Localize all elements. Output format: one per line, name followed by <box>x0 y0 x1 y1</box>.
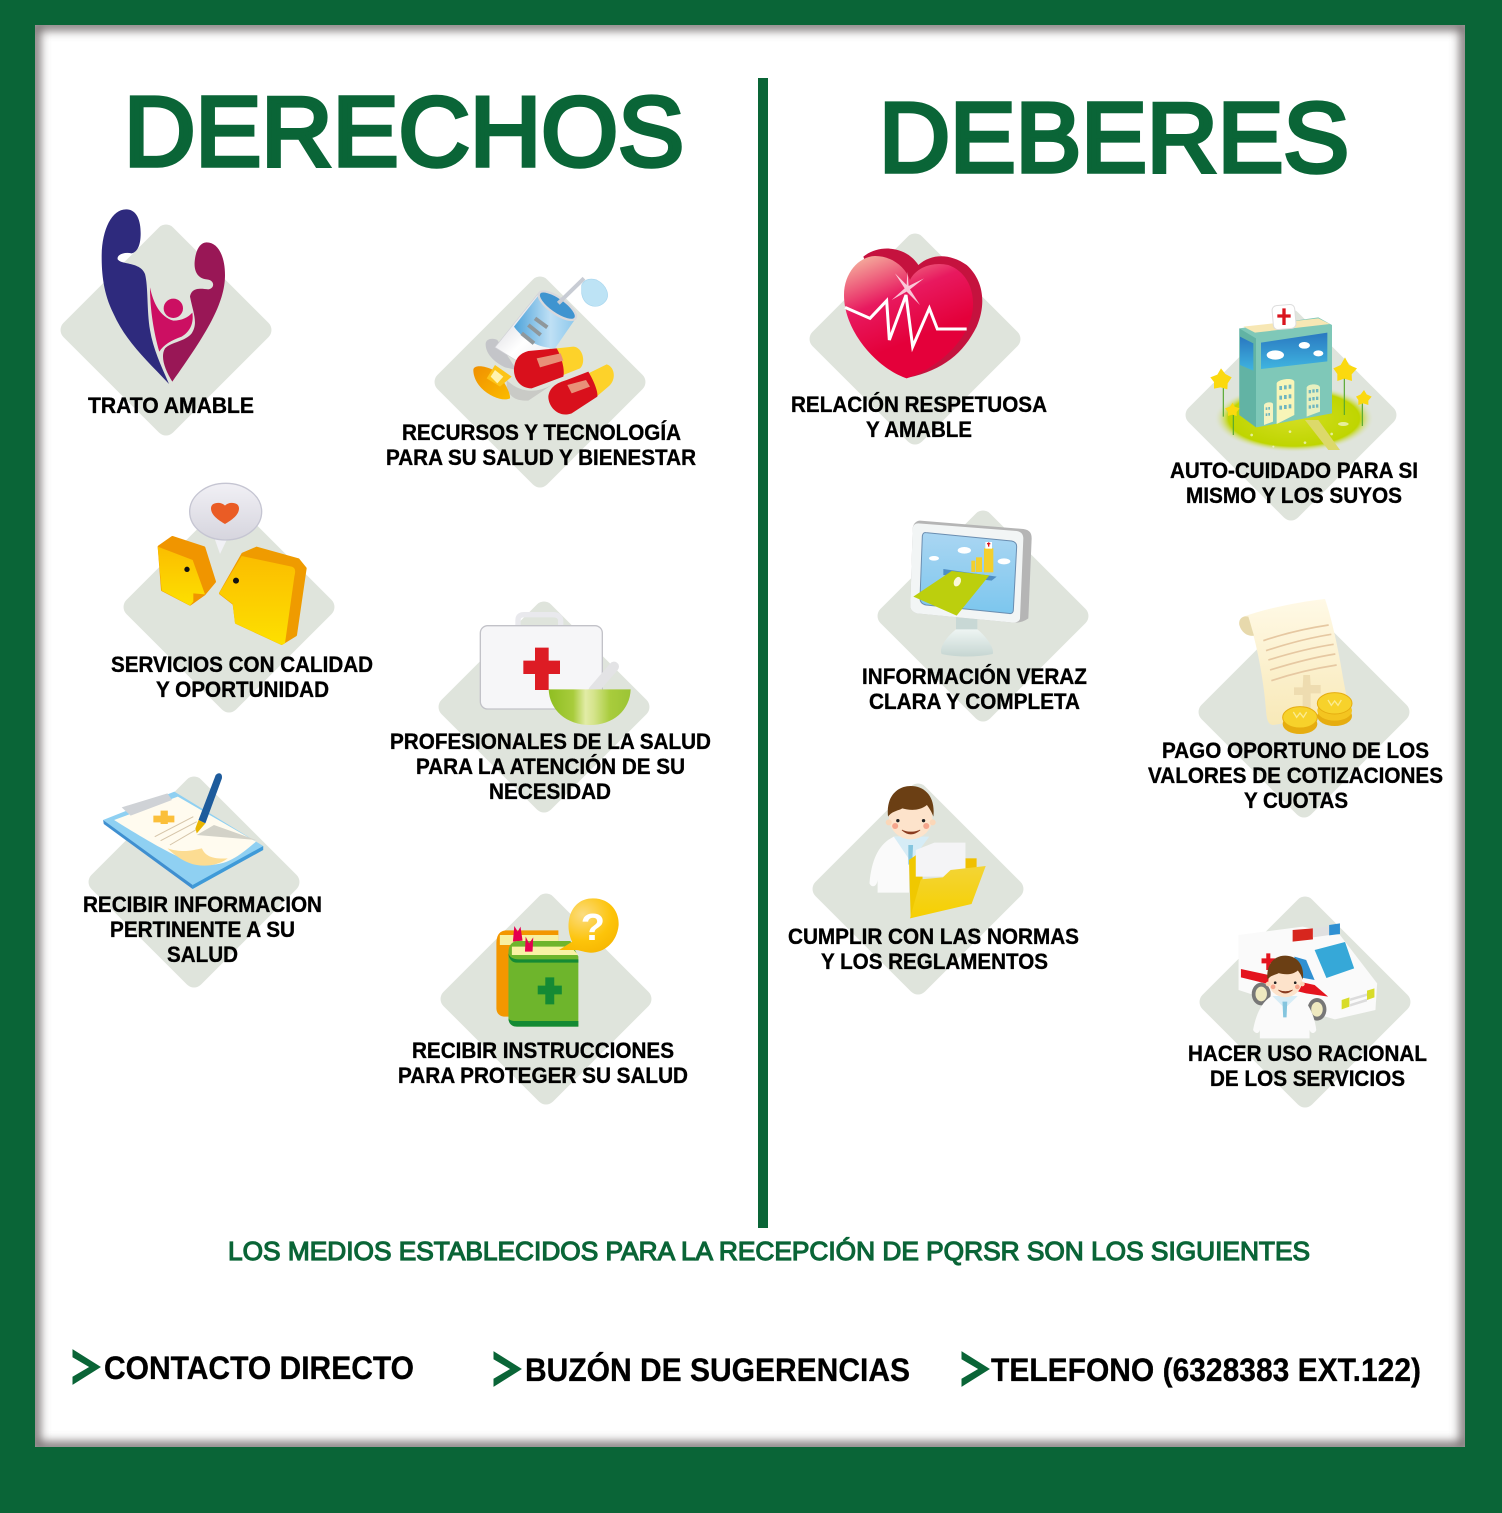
label <box>1148 738 1443 813</box>
label <box>398 1038 688 1088</box>
icon: family heart <box>102 209 225 384</box>
contact: buzon: BUZÓN DE SUGERENCIAS <box>525 1352 910 1388</box>
label: CLARA Y COMPLETA <box>869 689 1080 714</box>
label: Y OPORTUNIDAD <box>156 677 329 702</box>
label <box>791 392 1047 442</box>
icon: clipboard and pen <box>103 773 263 889</box>
item: informacion veraz <box>862 506 1093 726</box>
label: VALORES DE COTIZACIONES <box>1148 763 1443 788</box>
icon: hospital on grass <box>1210 304 1374 452</box>
icon: books and question bubble <box>496 898 619 1027</box>
label: Y CUOTAS <box>1244 788 1348 813</box>
label: SERVICIOS CON CALIDAD <box>111 652 373 677</box>
label: RECIBIR INSTRUCCIONES <box>412 1038 674 1063</box>
label: CUMPLIR CON LAS NORMAS <box>788 924 1079 949</box>
label <box>788 924 1079 974</box>
item: cumplir normas <box>788 779 1079 999</box>
panel: derechos <box>56 77 711 1109</box>
label: NECESIDAD <box>489 779 611 804</box>
label: RELACIÓN RESPETUOSA <box>791 392 1047 417</box>
label <box>111 652 373 702</box>
icon: books and question bubble: ? <box>581 907 605 949</box>
icon: syringe and pills <box>473 278 614 415</box>
center divider <box>758 78 768 1228</box>
label: SALUD <box>167 942 238 967</box>
heading: medios pqrsr: LOS MEDIOS ESTABLECIDOS PARA LA RECEPCIÓN DE PQRSR SON LOS SIGUIENTES <box>228 1236 1310 1266</box>
arrow <box>73 1350 100 1384</box>
label <box>390 729 711 804</box>
item: pago oportuno <box>1148 599 1443 822</box>
icon: scroll and coins <box>1239 599 1352 734</box>
icon: first aid kit and mortar <box>480 615 631 725</box>
icon: heart with pulse <box>844 249 982 378</box>
label: RECIBIR INFORMACION <box>83 892 322 917</box>
arrow <box>494 1352 521 1386</box>
label <box>386 420 696 470</box>
label <box>862 664 1087 714</box>
item: trato amable <box>56 209 276 440</box>
title: derechos: DERECHOS <box>124 77 684 187</box>
item: servicios con calidad <box>111 483 373 717</box>
label: PARA LA ATENCIÓN DE SU <box>416 754 685 779</box>
label: PAGO OPORTUNO DE LOS <box>1162 738 1429 763</box>
label <box>83 892 322 967</box>
label: HACER USO RACIONAL <box>1188 1041 1427 1066</box>
item: recursos y tecnologia <box>386 272 696 492</box>
item: recibir instrucciones <box>398 889 688 1109</box>
label: Y LOS REGLAMENTOS <box>821 949 1048 974</box>
label <box>1188 1041 1427 1091</box>
label: Y AMABLE <box>866 417 972 442</box>
label: DE LOS SERVICIOS <box>1210 1066 1405 1091</box>
contact: contacto directo: CONTACTO DIRECTO <box>104 1350 414 1386</box>
item: auto-cuidado <box>1170 304 1418 525</box>
panel: deberes <box>788 83 1443 1112</box>
label: PERTINENTE A SU <box>110 917 295 942</box>
icon: doctor with folder <box>869 786 986 918</box>
title: deberes: DEBERES <box>879 83 1349 193</box>
item: recibir informacion <box>83 772 322 992</box>
item: hacer uso racional <box>1188 892 1427 1112</box>
label: RECURSOS Y TECNOLOGÍA <box>402 420 681 445</box>
icon: two heads with speech bubble <box>158 483 305 645</box>
contact: telefono: TELEFONO (6328383 EXT.122) <box>991 1352 1421 1388</box>
item: profesionales de la salud <box>390 597 711 817</box>
label: AUTO-CUIDADO PARA SI <box>1170 458 1418 483</box>
label: PROFESIONALES DE LA SALUD <box>390 729 711 754</box>
label: MISMO Y LOS SUYOS <box>1186 483 1402 508</box>
item: relacion respetuosa <box>791 229 1047 449</box>
icon: ambulance and doctor <box>1239 923 1377 1038</box>
label <box>1170 458 1418 508</box>
label: PARA SU SALUD Y BIENESTAR <box>386 445 696 470</box>
arrow <box>962 1352 989 1386</box>
label: TRATO AMABLE <box>88 393 254 418</box>
label: PARA PROTEGER SU SALUD <box>398 1063 688 1088</box>
icon: computer monitor <box>910 521 1032 656</box>
label: INFORMACIÓN VERAZ <box>862 664 1087 689</box>
